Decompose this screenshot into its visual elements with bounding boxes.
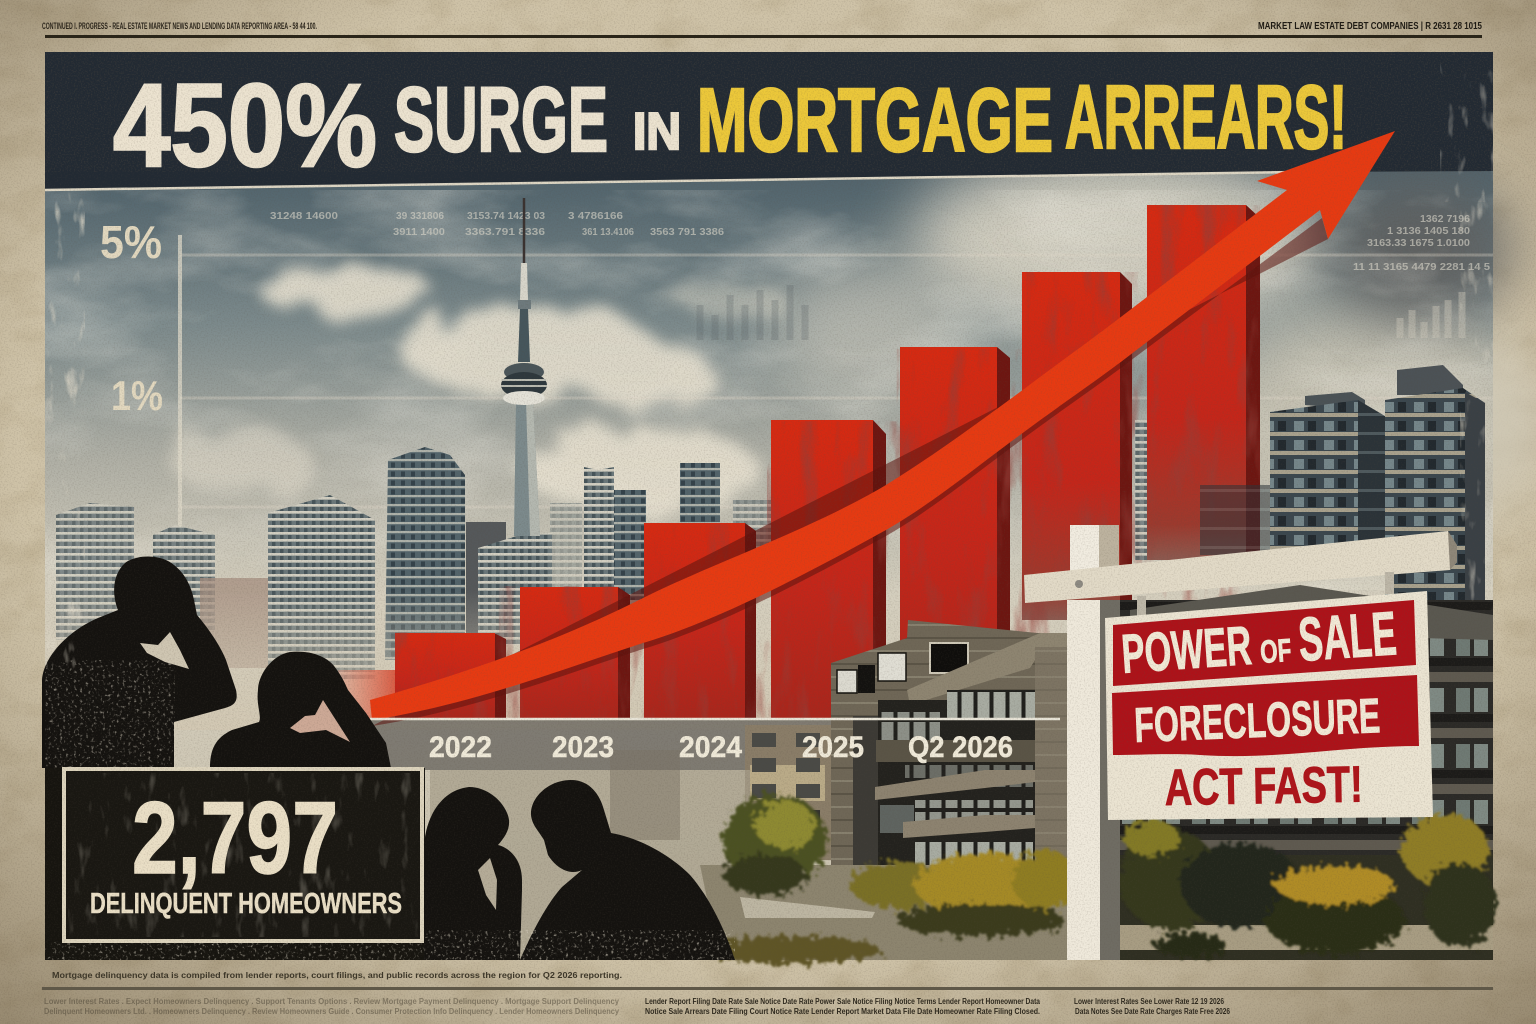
lower building behind sign [1100, 585, 1493, 960]
stat box: delinquent homeowners [64, 769, 422, 941]
bar: 2024 [644, 523, 756, 720]
bar: faded start [338, 670, 396, 720]
right residential towers [1135, 365, 1485, 620]
banner: foreclosure [1112, 675, 1419, 756]
ticker data overlay: 1362 7196 [1420, 214, 1470, 225]
footer strip: Mortgage delinquency data is compiled from lender reports, court filings, and public records across the region for Q2 2026 reporting. [52, 971, 622, 980]
footer strip: Notice Sale Arrears Date Filing Court Notice Rate Lender Report Market Data File Date Homeowner Rate Filing Closed. [645, 1007, 1040, 1016]
ticker data overlay: 361 13.4106 [582, 227, 634, 238]
title text: 450% [113, 60, 377, 192]
silhouette: couple [424, 780, 735, 960]
title text [113, 60, 1347, 192]
footer strip [42, 971, 1493, 1016]
banner: power of sale [1113, 599, 1416, 686]
header strip: CONTINUED I. PROGRESS - REAL ESTATE MARKET NEWS AND LENDING DATA REPORTING AREA - 58 44 100. [42, 21, 317, 32]
y axis with labels: 5% [100, 216, 162, 268]
ticker data overlay: 3911 1400 [393, 227, 445, 238]
sign crossbar [1024, 531, 1457, 620]
CN tower [501, 198, 547, 536]
bar: Q2 2026 [900, 347, 1010, 720]
title text: MORTGAGE [697, 71, 1053, 171]
footer strip: Data Notes See Date Rate Charges Rate Free 2026 [1075, 1007, 1230, 1016]
ticker data overlay: 31248 14600 [270, 211, 338, 222]
title text: SURGE [394, 69, 608, 171]
callout: act fast: ACT FAST! [1164, 756, 1363, 816]
ticker data overlay: 3 4786166 [568, 211, 623, 222]
red bar chart [338, 205, 1260, 770]
bar: extension one [1022, 272, 1132, 620]
bar: extension two [1147, 205, 1260, 560]
left annex [745, 725, 835, 860]
footer strip: Lower Interest Rates . Expect Homeowners Delinquency . Support Tenants Options . Review Mortgage Payment Delinquency . Mortgage Support Delinquency [44, 997, 620, 1006]
red growth arrow [370, 131, 1395, 726]
title text: ARREARS! [1065, 68, 1347, 168]
ticker data overlay: 3163.33 1675 1.0100 [1367, 238, 1470, 249]
clouds [170, 264, 790, 514]
bar: 2023 [520, 587, 630, 720]
for-sale sign [1024, 525, 1457, 960]
silhouette wear [45, 660, 735, 960]
footer strip: Delinquent Homeowners Ltd. . Homeowners Delinquency . Review Homeowners Guide . Consumer Protection Info Delinquency . Lender Homeowners Delinquency [44, 1007, 620, 1016]
ticker data overlay: 3363.791 8336 [465, 227, 546, 238]
ticker data overlay: 11 11 3165 4479 2281 14 5 [1353, 262, 1490, 273]
banner: power of sale: POWER [1120, 614, 1254, 685]
silhouette: woman holding head [210, 652, 391, 768]
footer strip: Lower Interest Rates See Lower Rate 12 19 2026 [1074, 997, 1224, 1006]
x axis and year labels: Q2 2026 [908, 731, 1013, 764]
silhouette: man holding head [42, 556, 237, 768]
banner: power of sale: SALE [1296, 599, 1399, 675]
city skyline [45, 447, 835, 730]
ticker data overlay: 3563 791 3386 [650, 227, 724, 238]
header strip [42, 20, 1482, 38]
ticker data overlay: 1 3136 1405 180 [1387, 226, 1470, 237]
y axis with labels: 1% [111, 372, 163, 419]
x axis and year labels: 2023 [552, 731, 614, 764]
footer strip: Lender Report Filing Date Rate Sale Notice Date Rate Power Sale Notice Filing Notice Terms Lender Report Homeowner Data [645, 997, 1040, 1006]
bar texture [395, 205, 1260, 720]
ticker data overlay [270, 211, 1490, 340]
bar: 2022 [395, 633, 506, 720]
banner: foreclosure: FORECLOSURE [1133, 689, 1381, 753]
stat box: delinquent homeowners: DELINQUENT HOMEOWNERS [90, 888, 402, 920]
sign panel [1105, 591, 1433, 820]
ticker data overlay: 39 331806 [396, 211, 444, 222]
ground and shrubs [430, 750, 1496, 964]
title text: IN [633, 103, 681, 161]
x axis and year labels: 2025 [802, 731, 864, 764]
banner: power of sale: OF [1259, 632, 1292, 670]
title band [45, 52, 1493, 202]
stat box: delinquent homeowners: 2,797 [132, 781, 338, 895]
apartment block [745, 620, 1067, 867]
x axis and year labels: 2022 [429, 731, 492, 764]
bar: 2025 [771, 420, 886, 720]
left silhouette base [45, 768, 425, 960]
ticker data overlay: 3153.74 1423 03 [467, 211, 545, 222]
x axis and year labels [370, 719, 1060, 764]
y axis with labels [100, 216, 180, 610]
x axis and year labels: 2024 [679, 731, 742, 764]
sign post [1067, 525, 1120, 960]
